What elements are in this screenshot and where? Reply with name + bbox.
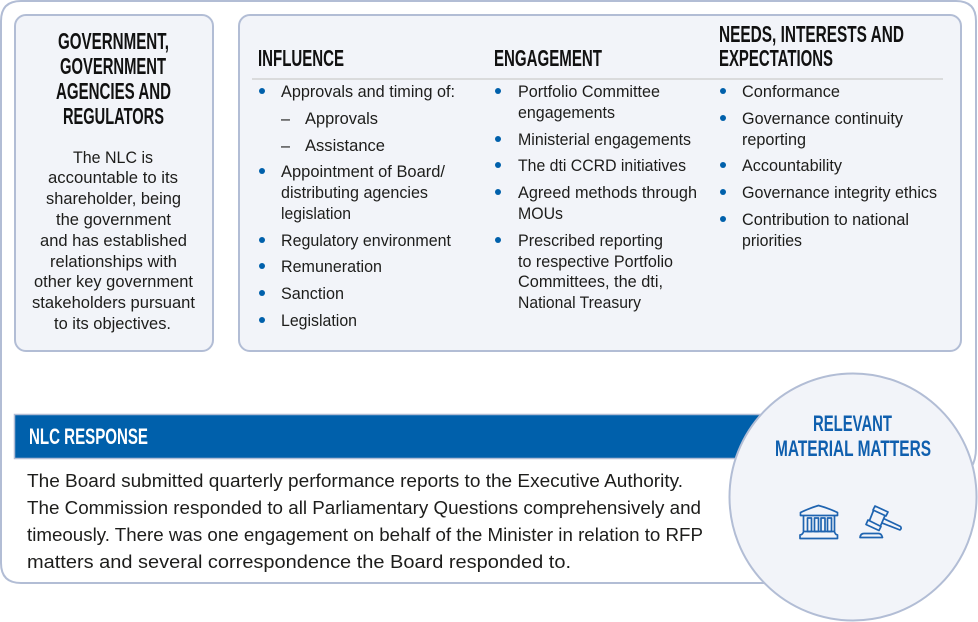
text block: response paragraph: timeously. There was one engagement on behalf of the Minister in relation to RFP	[27, 525, 703, 545]
panel: influence, engagement, needs	[239, 15, 961, 351]
icon: gavel	[860, 506, 901, 538]
column: engagement: National Treasury	[518, 294, 642, 312]
column: needs, interests and expectations	[719, 21, 937, 250]
column: influence: Assistance	[305, 137, 385, 155]
column: influence: Appointment of Board/	[281, 163, 445, 181]
column: engagement: Committees, the dti,	[518, 273, 663, 291]
circle: relevant material matters	[730, 374, 976, 620]
heading: government, government agencies and regulators: GOVERNMENT	[60, 53, 166, 79]
text block: response paragraph	[27, 471, 703, 572]
text block: accountability statement: The NLC is	[73, 149, 153, 167]
column: needs, interests and expectations: Contribution to national	[742, 211, 909, 229]
heading: government, government agencies and regulators	[56, 28, 171, 129]
column: influence: Remuneration	[281, 258, 382, 276]
column: engagement: MOUs	[518, 205, 563, 223]
text block: response paragraph: matters and several correspondence the Board responded to.	[27, 552, 571, 572]
column: needs, interests and expectations: Accountability	[742, 157, 843, 175]
text block: accountability statement: and has established	[40, 232, 187, 250]
column: engagement: The dti CCRD initiatives	[518, 157, 686, 175]
text block: accountability statement: the government	[56, 211, 171, 229]
column: engagement: Prescribed reporting	[518, 232, 663, 250]
text block: accountability statement: stakeholders pursuant	[32, 294, 195, 312]
heading: government, government agencies and regulators: REGULATORS	[63, 103, 164, 129]
column: influence: legislation	[281, 205, 351, 223]
column: needs, interests and expectations: EXPECTATIONS	[719, 45, 833, 71]
text block: accountability statement: relationships with	[50, 253, 177, 271]
icon: government building	[800, 506, 838, 538]
text block: response paragraph: The Commission responded to all Parliamentary Questions comprehensively and	[27, 498, 701, 518]
column: influence: Approvals	[305, 110, 378, 128]
text block: accountability statement: to its objectives.	[54, 315, 171, 333]
column: influence: –	[281, 137, 291, 155]
column: engagement	[494, 45, 697, 312]
column: influence: Regulatory environment	[281, 232, 451, 250]
heading: relevant material matters: RELEVANT	[813, 411, 892, 436]
text block: accountability statement: accountable to its	[48, 169, 178, 187]
text block: accountability statement: other key government	[34, 273, 193, 291]
column: influence: Sanction	[281, 285, 344, 303]
column: needs, interests and expectations: Conformance	[742, 83, 840, 101]
column: influence: distributing agencies	[281, 184, 428, 202]
column: engagement: Portfolio Committee	[518, 83, 660, 101]
heading: relevant material matters	[775, 411, 931, 461]
text block: response paragraph: The Board submitted quarterly performance reports to the Executive Authority.	[27, 471, 683, 491]
text block: accountability statement	[32, 149, 195, 333]
banner: NLC response: NLC RESPONSE	[29, 424, 148, 449]
column: needs, interests and expectations: priorities	[742, 232, 802, 250]
text block: accountability statement: shareholder, being	[46, 190, 181, 208]
heading: government, government agencies and regulators: AGENCIES AND	[56, 78, 171, 104]
column: engagement: Agreed methods through	[518, 184, 697, 202]
column: engagement: Ministerial engagements	[518, 131, 691, 149]
column: influence	[258, 45, 455, 330]
panel: government, agencies and regulators	[15, 15, 213, 351]
column: influence: Approvals and timing of:	[281, 83, 455, 101]
column: influence: Legislation	[281, 312, 357, 330]
column: needs, interests and expectations: reporting	[742, 131, 806, 149]
column: needs, interests and expectations: Governance integrity ethics	[742, 184, 937, 202]
column: needs, interests and expectations: Governance continuity	[742, 110, 904, 128]
column: engagement: to respective Portfolio	[518, 253, 673, 271]
column: influence: INFLUENCE	[258, 45, 344, 71]
column: influence: –	[281, 110, 291, 128]
heading: government, government agencies and regulators: GOVERNMENT,	[58, 28, 169, 54]
column: engagement: engagements	[518, 104, 615, 122]
column: engagement: ENGAGEMENT	[494, 45, 602, 71]
banner: NLC response	[14, 414, 784, 458]
